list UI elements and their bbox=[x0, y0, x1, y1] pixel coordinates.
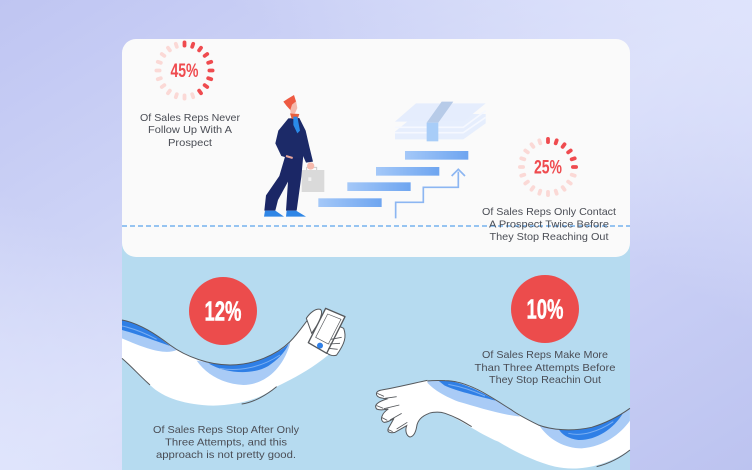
hand bbox=[307, 162, 314, 170]
donut stat: 25%: 25% bbox=[534, 158, 562, 178]
text: 12% description: approach is not pretty good. bbox=[156, 449, 296, 461]
blue pattern bbox=[425, 379, 632, 448]
illustration: money stack on stairs bbox=[318, 102, 486, 218]
icon: briefcase bbox=[302, 167, 324, 192]
jacket and arms bbox=[275, 118, 313, 163]
trousers bbox=[264, 153, 303, 211]
text: 25% description bbox=[482, 206, 616, 243]
text: 25% description: Of Sales Reps Only Contact bbox=[482, 206, 616, 218]
donut stat: 45%: 45% bbox=[170, 61, 199, 82]
text: 25% description: They Stop Reaching Out bbox=[490, 231, 609, 243]
text: 12% description: Of Sales Reps Stop After Only bbox=[153, 424, 300, 436]
icon: money stack bbox=[395, 102, 486, 141]
text: 10% description: They Stop Reachin Out bbox=[489, 374, 601, 386]
text: 12% description: Three Attempts, and this bbox=[165, 436, 287, 448]
belt hand bbox=[286, 156, 293, 158]
text: 45% description: Follow Up With A bbox=[148, 124, 232, 136]
panel: white upper section bbox=[122, 39, 630, 257]
icon: smartphone bbox=[308, 308, 345, 353]
donut stat: 45% bbox=[154, 40, 214, 100]
text: 10% description: Of Sales Reps Make More bbox=[482, 349, 608, 361]
illustration: businessman with briefcase bbox=[264, 95, 324, 217]
text: 10% description bbox=[474, 349, 616, 386]
text: 12% description bbox=[153, 424, 300, 461]
stat circle: 10%: 10% bbox=[526, 294, 564, 324]
stair steps bbox=[318, 151, 468, 207]
arm shape bbox=[423, 380, 630, 468]
stat circle: 12% bbox=[189, 277, 257, 345]
open hand bbox=[376, 380, 429, 437]
stat circle: 12%: 12% bbox=[204, 296, 242, 326]
dashed baseline bbox=[122, 225, 630, 227]
blue pattern bbox=[122, 320, 291, 385]
text: 45% description bbox=[140, 112, 241, 149]
thumb bbox=[306, 309, 322, 333]
text: 10% description: Than Three Attempts Before bbox=[474, 362, 616, 374]
arm shape bbox=[122, 310, 333, 406]
arrow: rising stairs bbox=[396, 169, 465, 218]
text: 45% description: Of Sales Reps Never bbox=[140, 112, 241, 124]
panel: blue lower section bbox=[122, 232, 630, 470]
stat circle: 10% bbox=[511, 275, 579, 343]
hand fist bbox=[326, 325, 345, 356]
illustration: left arm holding phone bbox=[122, 308, 345, 406]
donut stat: 25% bbox=[518, 137, 578, 197]
shirt and tie bbox=[290, 113, 299, 120]
text: 25% description: A Prospect Twice Before bbox=[489, 218, 609, 230]
text: 45% description: Prospect bbox=[168, 137, 212, 149]
arm outlines bbox=[427, 380, 630, 467]
shoes bbox=[264, 211, 306, 217]
arm outlines bbox=[122, 310, 317, 404]
head and hair bbox=[283, 95, 297, 113]
illustration: right arm with open hand bbox=[376, 379, 632, 468]
finger lines bbox=[377, 393, 407, 432]
